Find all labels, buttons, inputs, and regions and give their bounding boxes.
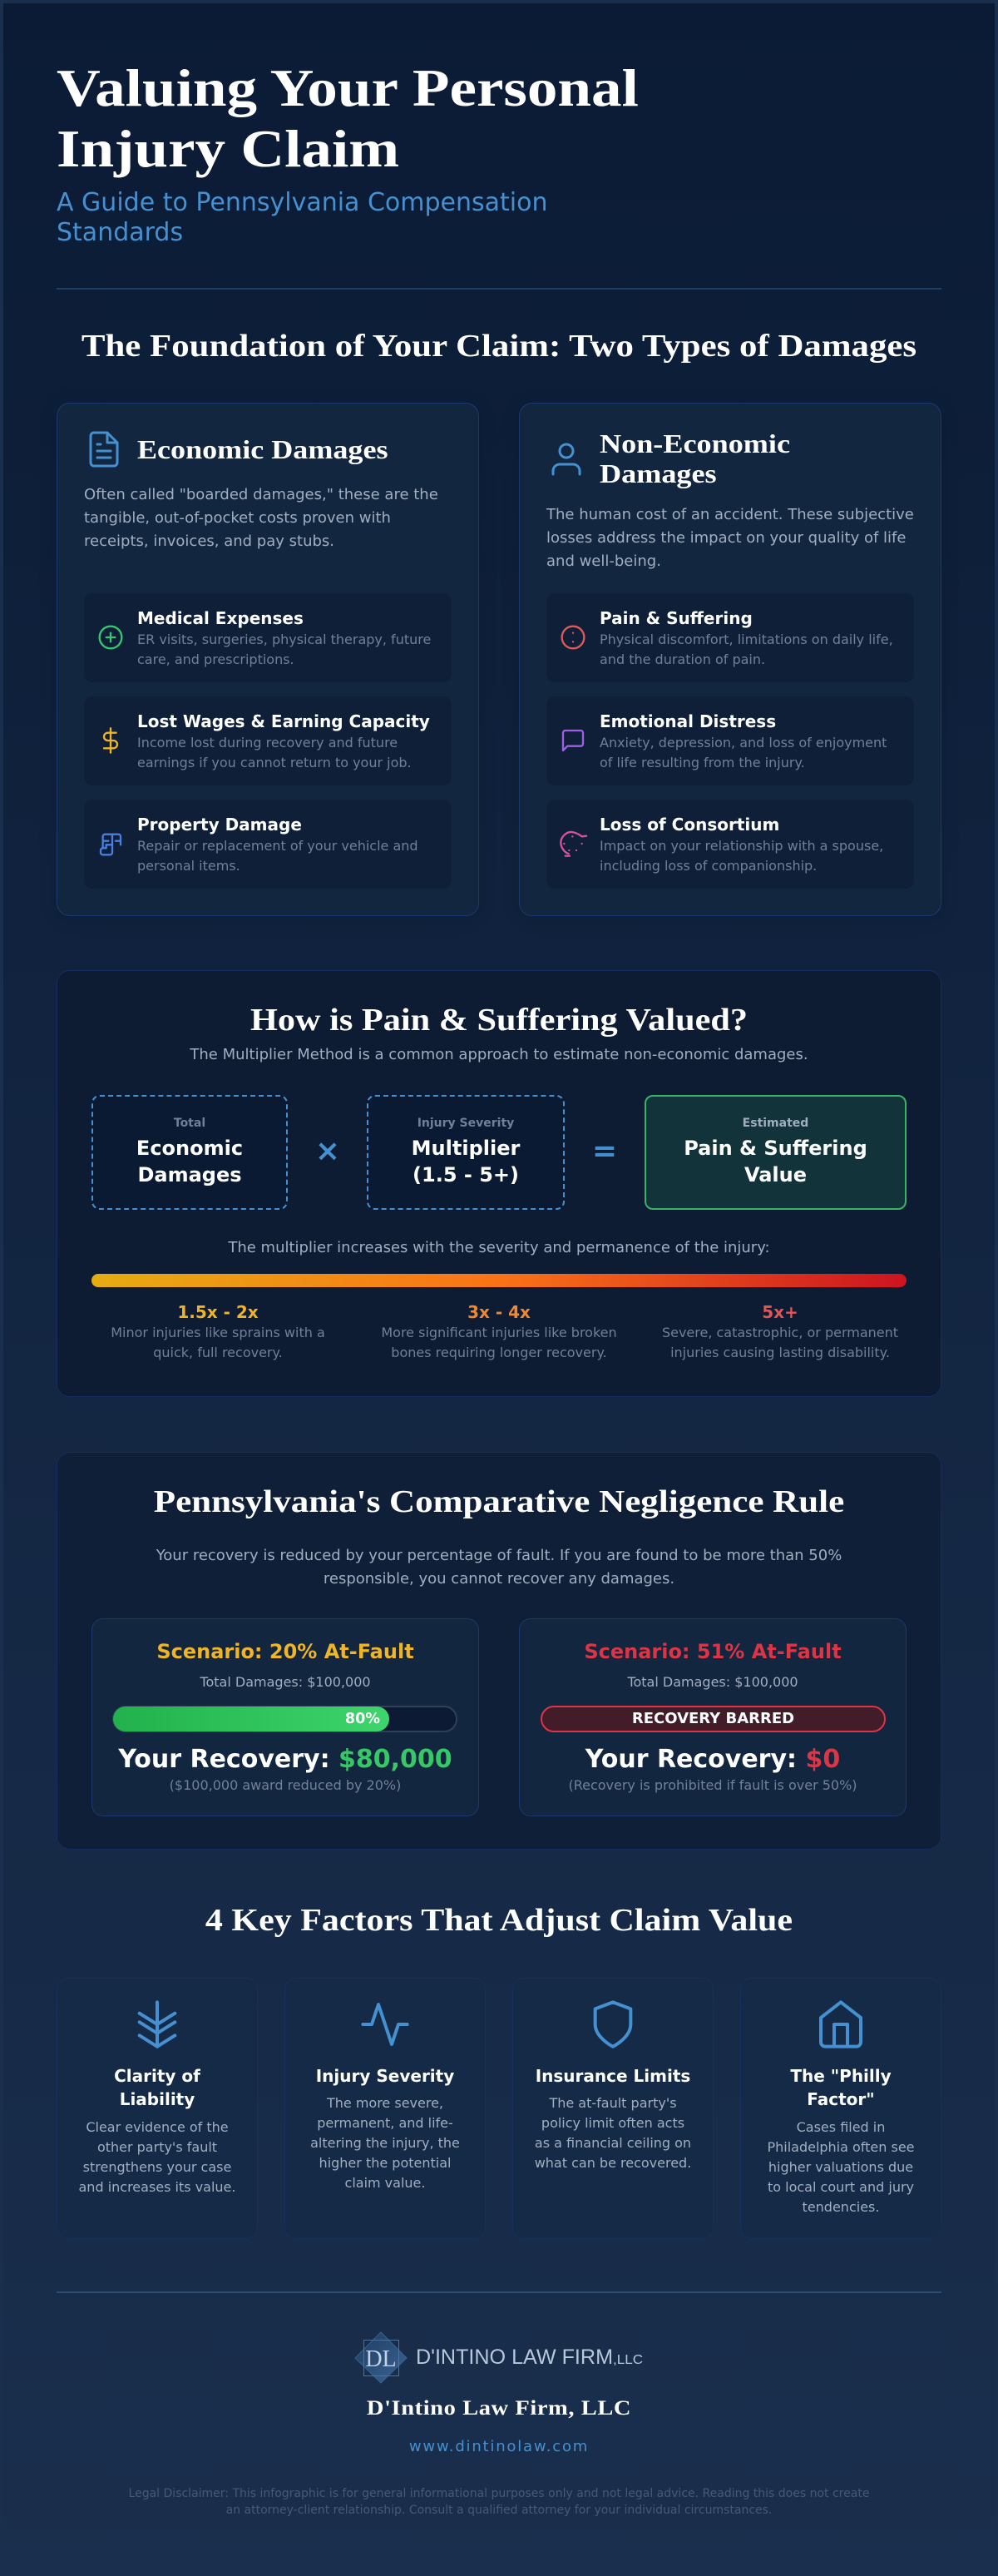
item: medical expenses [84,593,452,682]
scenario card: 51 percent: Your Recovery: $0 [585,1745,840,1774]
factor card: injury severity: altering the injury, the [310,2135,460,2151]
text: economic description [84,486,438,550]
panel: pain and suffering valuation [57,970,941,1397]
formula box: economic damages [91,1095,288,1210]
text: economic description: tangible, out-of-pocket costs proven with [84,509,391,527]
heading: non-economic damages: Non-Economic [600,429,790,458]
factor card: injury severity: Injury Severity [316,2066,454,2086]
item: property damage [84,800,452,889]
text: negligence explanation: Your recovery is reduced by your percentage of fault. If you are found to be more than 50% [156,1547,842,1564]
scenario card: 20 percent: Scenario: 20% At-Fault [156,1640,414,1663]
scale column: moderate: More significant injuries like broken [381,1325,617,1340]
factor card: clarity of liability: other party's fault [97,2139,217,2155]
scenario card: 51 percent [519,1618,907,1816]
logo: ,LLC [613,2353,643,2367]
title: Injury Claim [57,119,399,178]
icon: consortium [560,830,587,857]
logo: DL [365,2346,397,2372]
icon: shield [594,2000,632,2048]
operator: times: × [315,1134,340,1168]
item: lost wages [84,696,452,785]
item: emotional distress: Emotional Distress [600,711,776,731]
factor card: clarity of liability: Liability [120,2089,195,2109]
factor card: insurance limits: what can be recovered. [535,2155,691,2171]
text: non-economic description: losses address the impact on your quality of life [546,529,906,547]
scale column: moderate: bones requiring longer recovery. [391,1345,607,1360]
scale column: severe: Severe, catastrophic, or permanent [662,1325,898,1340]
formula box: economic damages: Total [174,1117,205,1130]
subtitle: A Guide to Pennsylvania Compensation [57,188,547,217]
item: medical expenses: Medical Expenses [137,608,304,628]
item: loss of consortium: Loss of Consortium [600,815,779,835]
text: non-economic description: The human cost of an accident. These subjective [546,506,914,523]
text: multiplier note: The multiplier increases with the severity and permanence of the injury: [228,1239,770,1256]
item: pain and suffering: Physical discomfort, limitations on daily life, [600,632,893,647]
heading: economic damages: Economic Damages [137,434,388,464]
heading: how is pain valued: How is Pain & Suffering Valued? [250,1003,748,1038]
item: loss of consortium: Impact on your relationship with a spouse, [600,838,883,854]
progress bar: 80 percent [112,1706,457,1732]
title: Valuing Your Personal [57,58,639,117]
formula box: estimated value: Estimated [743,1117,808,1130]
formula box: economic damages: Economic [136,1137,243,1160]
item: property damage: personal items. [137,858,240,874]
logo: D'INTINO LAW FIRM [416,2346,613,2369]
factor card: philly factor: tendencies. [803,2199,879,2215]
scenario card: 51 percent: Total Damages: $100,000 [627,1674,798,1690]
factor card: injury severity: higher the potential [319,2155,451,2171]
item: emotional distress [546,696,914,785]
logo [354,2331,643,2384]
scenario card: 20 percent: Your Recovery: $80,000 [118,1745,452,1774]
severity scale bar [91,1274,907,1287]
scenario card: 51 percent: Scenario: 51% At-Fault [584,1640,842,1663]
panel: non-economic damages [519,403,941,916]
heading: comparative negligence: Pennsylvania's Comparative Negligence Rule [154,1484,844,1519]
legal disclaimer [129,2487,869,2517]
scale column: minor: 1.5x - 2x [177,1302,259,1322]
text: negligence explanation [156,1547,842,1588]
factor card: philly factor: higher valuations due [768,2159,913,2175]
factor card: insurance limits: Insurance Limits [536,2066,690,2086]
formula box: economic damages: Damages [137,1163,242,1186]
factor card: clarity of liability: Clarity of [114,2066,200,2086]
icon: dollar [103,727,118,754]
title [57,58,639,178]
subtitle [57,188,547,247]
heading: non-economic damages: Damages [600,458,717,488]
scale column: minor: Minor injuries like sprains with a [111,1325,325,1340]
item: pain and suffering: Pain & Suffering [600,608,753,628]
icon: message [562,729,584,752]
item: lost wages: earnings if you cannot return to your job. [137,755,412,770]
item: loss of consortium [546,800,914,889]
factor card: injury severity: permanent, and life- [317,2115,453,2131]
icon: pain circle [561,626,585,649]
item: loss of consortium: including loss of companionship. [600,858,817,874]
icon: activity [361,2003,409,2046]
text: negligence explanation: responsible, you cannot recover any damages. [324,1570,674,1588]
item: lost wages: Lost Wages & Earning Capacity [137,711,430,731]
item: emotional distress: of life resulting from the injury. [600,755,805,770]
firm name: D'Intino Law Firm, LLC [367,2397,631,2420]
item: medical expenses: ER visits, surgeries, physical therapy, future [137,632,431,647]
text: economic description: receipts, invoices, and pay stubs. [84,533,334,550]
factor card: philly factor: to local court and jury [768,2179,914,2195]
factor card: philly factor: Cases filed in [797,2119,885,2135]
formula box: multiplier: Multiplier [412,1137,520,1160]
formula box: multiplier [367,1095,565,1210]
factor card: philly factor: Factor" [807,2089,875,2109]
text: multiplier intro: The Multiplier Method is a common approach to estimate non-economic damages. [190,1046,808,1063]
factor card: philly factor: The "Philly [790,2066,892,2086]
scale column: moderate [381,1302,617,1360]
factor card: philly factor: Philadelphia often see [767,2139,915,2155]
scale column: severe: 5x+ [762,1302,798,1322]
scale column: minor: quick, full recovery. [153,1345,283,1360]
text: non-economic description: and well-being. [546,552,661,570]
factor card: injury severity: The more severe, [327,2095,443,2111]
heading: non-economic damages [600,429,790,488]
subtitle: Standards [57,218,183,247]
panel: comparative negligence [57,1452,941,1850]
factor card: injury severity: claim value. [345,2175,425,2191]
item: lost wages: Income lost during recovery and future [137,735,398,751]
formula box: multiplier: Injury Severity [417,1117,514,1130]
item: pain and suffering [546,593,914,682]
legal disclaimer: Legal Disclaimer: This infographic is for general informational purposes only and not legal advice. Reading this does not create [129,2487,869,2500]
formula box: estimated value: Value [744,1163,807,1186]
scenario card: 20 percent [91,1618,479,1816]
scenario card: 20 percent: Total Damages: $100,000 [200,1674,371,1690]
icon: property [100,834,121,855]
scale column: minor [111,1302,325,1360]
recovery barred bar [541,1706,886,1732]
item: emotional distress: Anxiety, depression, and loss of enjoyment [600,735,887,751]
scenario card: 20 percent: ($100,000 award reduced by 20%) [170,1777,401,1793]
formula box: estimated value [645,1095,907,1210]
panel: economic damages [57,403,479,916]
factor card: clarity of liability: and increases its value. [78,2179,235,2195]
item: property damage: Property Damage [137,815,302,835]
factor card: clarity of liability: Clear evidence of the [86,2119,229,2135]
text: economic description: Often called "boarded damages," these are the [84,486,438,503]
formula box: multiplier: (1.5 - 5+) [413,1163,519,1186]
formula box: estimated value: Pain & Suffering [684,1137,867,1160]
icon: person [552,443,581,476]
icon: home [819,2000,862,2048]
factor card: insurance limits: policy limit often acts [541,2115,684,2131]
scale column: severe: injuries causing lasting disability. [670,1345,890,1360]
item: pain and suffering: and the duration of pain. [600,651,765,667]
icon: plus circle [98,626,123,649]
icon: chevrons [138,2000,176,2048]
icon: document [90,431,118,468]
scale column: severe [662,1302,898,1360]
item: medical expenses: care, and prescriptions. [137,651,294,667]
factor card: insurance limits: as a financial ceiling on [535,2135,691,2151]
factor card: philly factor [740,1978,941,2239]
factor card: insurance limits [512,1978,714,2239]
scenario card: 51 percent: (Recovery is prohibited if fault is over 50%) [568,1777,857,1793]
factor card: insurance limits: The at-fault party's [549,2095,677,2111]
heading: key factors: 4 Key Factors That Adjust Claim Value [205,1903,793,1938]
legal disclaimer: an attorney-client relationship. Consult a qualified attorney for your individual circumstances. [226,2504,772,2517]
text: non-economic description [546,506,914,570]
progress bar: 80 percent: 80% [345,1711,380,1727]
recovery barred bar: RECOVERY BARRED [632,1710,794,1727]
heading: two types of damages: The Foundation of Your Claim: Two Types of Damages [82,329,916,364]
item: property damage: Repair or replacement of your vehicle and [137,838,418,854]
website: www.dintinolaw.com [409,2438,589,2455]
factor card: clarity of liability [57,1978,258,2239]
operator: equals: = [592,1134,617,1168]
factor card: injury severity [284,1978,486,2239]
scale column: moderate: 3x - 4x [467,1302,531,1322]
factor card: clarity of liability: strengthens your case [83,2159,231,2175]
